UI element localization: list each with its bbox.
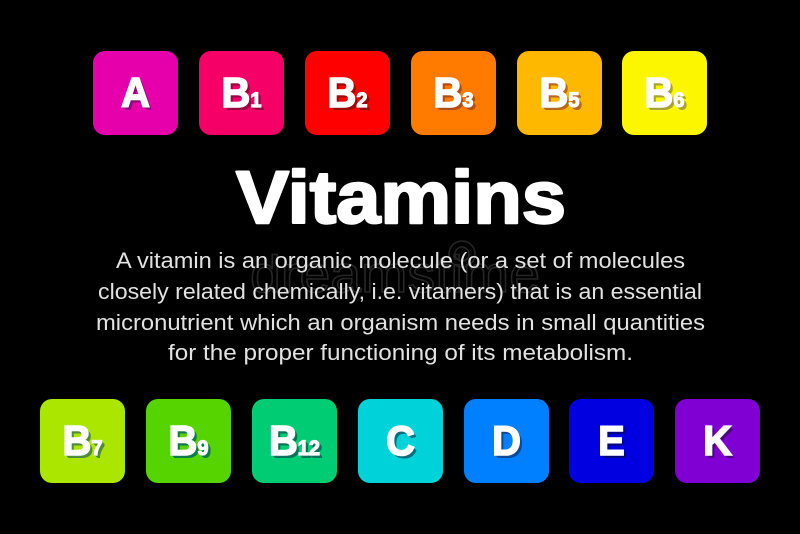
tile: vitamin D: D xyxy=(492,417,521,464)
tile: vitamin C xyxy=(358,399,443,483)
tile: vitamin C: C xyxy=(386,417,415,464)
tile: vitamin B12: B12 xyxy=(269,417,320,464)
tile: vitamin B7: B7 xyxy=(63,417,102,464)
tile: vitamin D xyxy=(464,399,549,483)
tile: vitamin B3: B3 xyxy=(434,69,473,116)
tile: vitamin K: K xyxy=(703,417,732,464)
tile: vitamin B5: B5 xyxy=(540,69,579,116)
title: Vitamins xyxy=(236,156,566,239)
tile: vitamin B2 xyxy=(305,51,390,135)
tile: vitamin B2: B2 xyxy=(328,69,367,116)
watermark: dreamstime xyxy=(250,246,540,304)
description text: A vitamin is an organic molecule (or a set of molecules xyxy=(116,248,685,273)
tile: vitamin B6 xyxy=(622,51,707,135)
description text: for the proper functioning of its metabolism. xyxy=(168,340,633,365)
tile: vitamin A xyxy=(93,51,178,135)
tile: vitamin A: A xyxy=(121,69,150,116)
description text: micronutrient which an organism needs in small quantities xyxy=(96,310,705,335)
tile: vitamin B1: B1 xyxy=(222,69,261,116)
description text xyxy=(96,248,705,365)
tile: vitamin B5 xyxy=(517,51,602,135)
tile: vitamin B12 xyxy=(252,399,337,483)
description text: closely related chemically, i.e. vitamers) that is an essential xyxy=(98,279,702,304)
tile: vitamin B7 xyxy=(40,399,125,483)
tile: vitamin B6: B6 xyxy=(645,69,684,116)
tile: vitamin B1 xyxy=(199,51,284,135)
tile: vitamin B3 xyxy=(411,51,496,135)
tile: vitamin K xyxy=(675,399,760,483)
tile: vitamin E: E xyxy=(598,417,625,464)
tile: vitamin B9 xyxy=(146,399,231,483)
tile: vitamin E xyxy=(569,399,654,483)
tile: vitamin B9: B9 xyxy=(169,417,208,464)
